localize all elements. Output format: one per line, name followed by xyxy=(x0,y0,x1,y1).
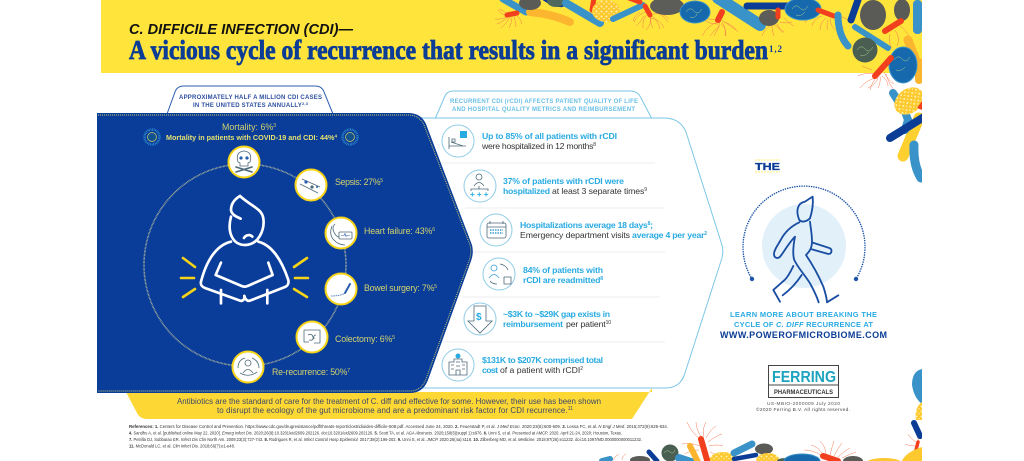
label: THE xyxy=(755,160,780,173)
text: copyright: US-MBIO-2000009 July 2020 xyxy=(767,401,840,407)
item: hospitalized three times xyxy=(464,170,647,202)
tab: recurrent CDI xyxy=(435,91,652,119)
label: re-recurrence: 7 xyxy=(347,368,350,374)
item: hospitalized: 8 xyxy=(593,142,596,148)
logo: Ferring: PHARMACEUTICALS xyxy=(774,389,834,396)
label: THE: THE xyxy=(755,162,780,173)
panel: recurrent CDI burden xyxy=(420,118,723,388)
item: hospitalized three times: 37% of patients with rCDI were xyxy=(503,176,624,186)
label: colectomy: 5 xyxy=(392,335,395,341)
callout: learn more: CYCLE OF C. DIFF RECURRENCE AT xyxy=(734,320,873,329)
references: 11. McDonald LC, et al. Clin Infect Dis. 2018;66(7):e1-e48. xyxy=(129,444,235,448)
label: covid mortality: Mortality in patients with COVID-19 and CDI: 44% xyxy=(166,133,334,142)
label: bowel surgery: Bowel surgery: 7% xyxy=(364,283,434,293)
item: readmitted: 84% of patients with xyxy=(523,265,603,275)
icon: person with stomach pain xyxy=(201,196,288,303)
label: heart failure: 6 xyxy=(432,227,435,233)
title superscript: 1,2 xyxy=(769,44,782,54)
panel: antibiotics note: 11 xyxy=(568,406,573,412)
item: reimbursement gap: $ xyxy=(476,312,482,323)
logo: Ferring: FERRING xyxy=(772,369,836,386)
tab: half a million cases: APPROXIMATELY HALF A MILLION CDI CASES xyxy=(179,95,322,101)
bacteria decoration: bottom xyxy=(602,422,922,461)
label: bowel surgery: 5 xyxy=(434,284,437,290)
item: hospitalized three times: hospitalized xyxy=(503,186,550,196)
item: hospitalization days: Hospitalizations average 18 days xyxy=(520,220,648,230)
tab: recurrent CDI: AND HOSPITAL QUALITY METRICS AND REIMBURSEMENT xyxy=(452,107,635,113)
icon: skull xyxy=(228,146,260,178)
item: hospitalization days xyxy=(480,214,707,246)
item: hospitalized: were hospitalized in 12 months xyxy=(482,141,593,151)
logo: Ferring xyxy=(768,366,839,398)
references: 4. Sandhu A, et al. [published online May 22, 2020]. Emerg Infect Dis. 2020;26(9):10.3201/eid2609.202126. doi:10.3201/eid2609.202126. 5. Scott TA, et al. AGA Abstracts. 2020;158(6)(suppl 1):s976. 6. Unni S, et al. Presented at AMCP. 2020. April 21-24, 2020; Houston, Texas. xyxy=(129,430,622,436)
item: hospitalized: Up to 85% of all patients with rCDI xyxy=(482,131,617,141)
icon: sepsis xyxy=(296,170,326,200)
bacteria decoration: right edge xyxy=(886,87,922,420)
label: colectomy: Colectomy: 6% xyxy=(335,334,392,344)
item: hospitalized three times: at least 3 separate times xyxy=(552,186,644,196)
item: total cost xyxy=(442,349,603,381)
icon: heart xyxy=(326,218,356,248)
panel: CDI outcomes xyxy=(97,113,473,393)
panel: antibiotics note: Antibiotics are the standard of care for the treatment of C. diff and effective for some. However, their use has been shown xyxy=(177,397,601,406)
icon: pain rays xyxy=(181,258,308,297)
callout: learn more: LEARN MORE ABOUT BREAKING THE xyxy=(730,310,877,319)
item: reimbursement gap xyxy=(464,303,611,335)
bacteria decoration: top xyxy=(495,0,922,90)
label: heart failure: Heart failure: 43% xyxy=(364,226,432,236)
references: 7. Petrilla DJ, Subbarao ER. Infect Dis Clin North Am. 2009;23(3):727-743. 8. Rodrigues R, et al. Infect Control Hosp Epidemiol. 2017;38(2):196-202. 9. Unni S, et al. JMCP. 2020;26(4a):s118. 10. Zilberberg MD, et al. Medicine. 2018;97(26):e11232. doi:10.1097/MD.0000000000011232. xyxy=(129,437,642,442)
panel: antibiotics note xyxy=(126,388,652,419)
item: reimbursement gap: per patient xyxy=(566,319,606,329)
label: mortality: 3 xyxy=(273,123,276,129)
item: hospitalization days: 8 xyxy=(648,221,651,227)
item: total cost: 2 xyxy=(580,366,583,372)
text: copyright xyxy=(756,401,850,413)
label: sepsis: Sepsis: 27% xyxy=(335,177,381,187)
icon: re-recurrence xyxy=(232,352,264,382)
label: sepsis: 5 xyxy=(380,178,383,184)
title: headline: A vicious cycle of recurrence that results in a significant burden xyxy=(129,35,768,65)
tab: half a million cases: 2,3 xyxy=(302,101,309,106)
title: eyebrow: C. DIFFICILE INFECTION (CDI)— xyxy=(129,22,353,38)
dotted ring xyxy=(144,164,346,366)
item: hospitalization days: Emergency department visits xyxy=(520,230,631,240)
icon: bowel surgery xyxy=(326,274,356,304)
item: readmitted xyxy=(483,258,603,290)
callout: learn more: WWW.POWEROFMICROBIOME.COM xyxy=(720,330,887,340)
item: readmitted: 8 xyxy=(600,276,603,282)
references xyxy=(129,424,668,448)
header band xyxy=(101,0,922,73)
item: hospitalization days: 2 xyxy=(704,231,707,237)
icon: walking person xyxy=(743,186,865,302)
item: hospitalized xyxy=(442,125,617,157)
tab: recurrent CDI: RECURRENT CDI (rCDI) AFFECTS PATIENT QUALITY OF LIFE xyxy=(450,99,638,105)
item: readmitted: rCDI are readmitted xyxy=(523,275,600,285)
label: covid mortality: 4 xyxy=(334,134,337,138)
panel: antibiotics note: to disrupt the ecology of the gut microbiome and are a predominant risk factor for CDI recurrence. xyxy=(217,406,568,415)
item: hospitalization days: ; xyxy=(650,220,653,230)
label: re-recurrence: Re-recurrence: 50% xyxy=(272,367,347,377)
text: copyright: ©2020 Ferring B.V. All rights reserved. xyxy=(756,406,850,413)
item: reimbursement gap: reimbursement xyxy=(503,319,563,329)
tab: half a million cases: IN THE UNITED STATES ANNUALLY xyxy=(193,103,302,109)
icon: colectomy xyxy=(296,322,328,352)
icon: covid particle right xyxy=(342,130,358,144)
item: total cost: $131K to $207K comprised total xyxy=(482,355,603,365)
item: hospitalized three times: 9 xyxy=(644,187,647,193)
item: total cost: of a patient with rCDI xyxy=(500,365,580,375)
tab: half a million cases xyxy=(167,86,333,114)
item: reimbursement gap: 10 xyxy=(606,320,611,326)
item: hospitalized three times: + + + xyxy=(470,190,489,199)
callout: learn more xyxy=(720,310,887,340)
item: reimbursement gap: ~$3K to ~$29K gap exists in xyxy=(503,309,610,319)
icon: covid particle left xyxy=(144,130,160,144)
label: mortality: Mortality: 6% xyxy=(222,122,273,132)
references: References: 1. Centers for Disease Control and Prevention. https://www.cdc.gov/drugresistance/pdf/threats-report/clostridioides-difficile-508.pdf. Accessed June 24, 2020. 2. Feuerstadt P, et al. J Med Econ. 2020;23(6):600-609. 3. Lessa FC, et al. N Engl J Med. 2015;372(9):825-834. xyxy=(129,424,668,429)
item: hospitalization days: average 4 per year xyxy=(632,230,704,240)
item: total cost: cost xyxy=(482,365,498,375)
